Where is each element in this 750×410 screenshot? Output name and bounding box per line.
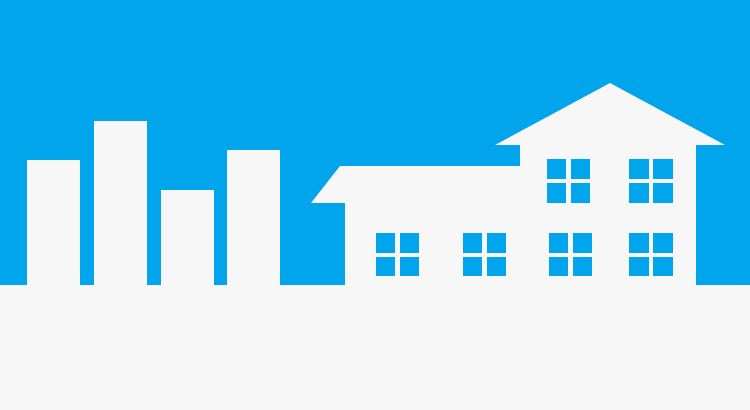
ground: [0, 285, 750, 410]
house: [311, 83, 725, 286]
windows: [376, 159, 673, 276]
bar chart skyline: [27, 121, 280, 286]
